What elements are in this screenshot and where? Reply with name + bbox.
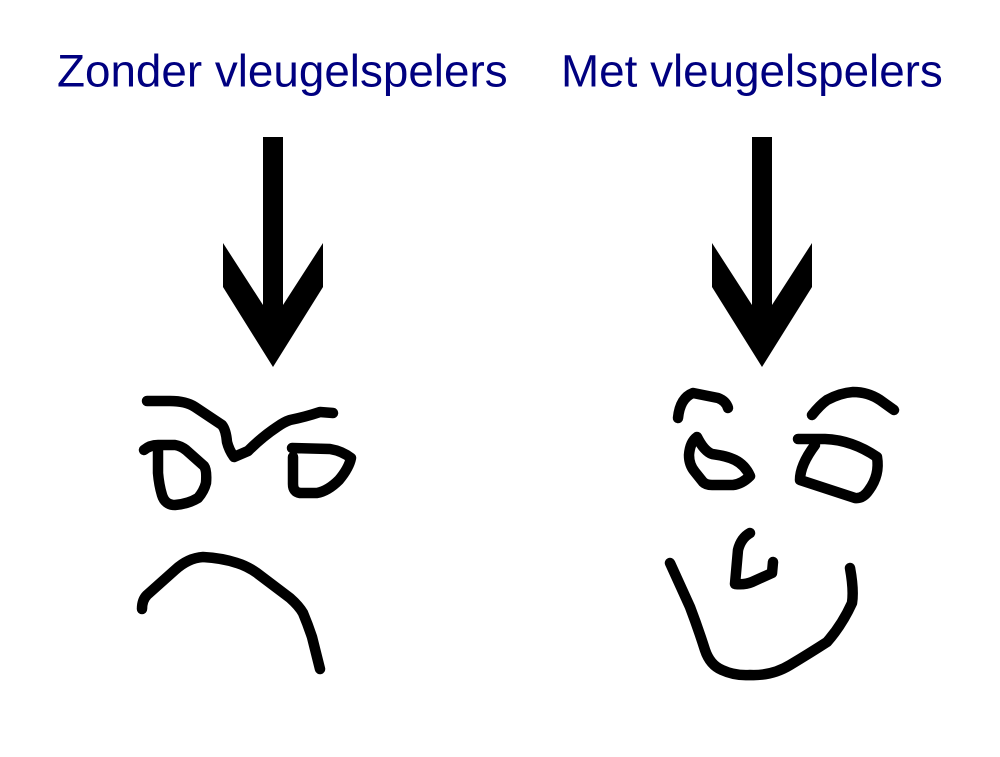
arrow: right <box>712 137 812 367</box>
angry mouth <box>142 557 320 669</box>
happy left eyebrow <box>678 393 728 418</box>
happy right eye <box>798 439 878 498</box>
icon: happy face <box>670 392 894 675</box>
heading: met vleugelspelers: Met vleugelspelers <box>561 46 943 96</box>
happy right eyebrow <box>812 392 894 415</box>
angry eyebrows <box>147 401 333 457</box>
happy left eye <box>689 437 750 485</box>
arrow: left <box>223 137 323 367</box>
icon: angry face <box>142 401 351 669</box>
angry right eye <box>292 448 351 493</box>
heading: zonder vleugelspelers: Zonder vleugelspelers <box>57 46 508 96</box>
happy mouth <box>670 563 853 675</box>
angry left eye <box>144 445 206 505</box>
happy nose <box>735 533 773 584</box>
